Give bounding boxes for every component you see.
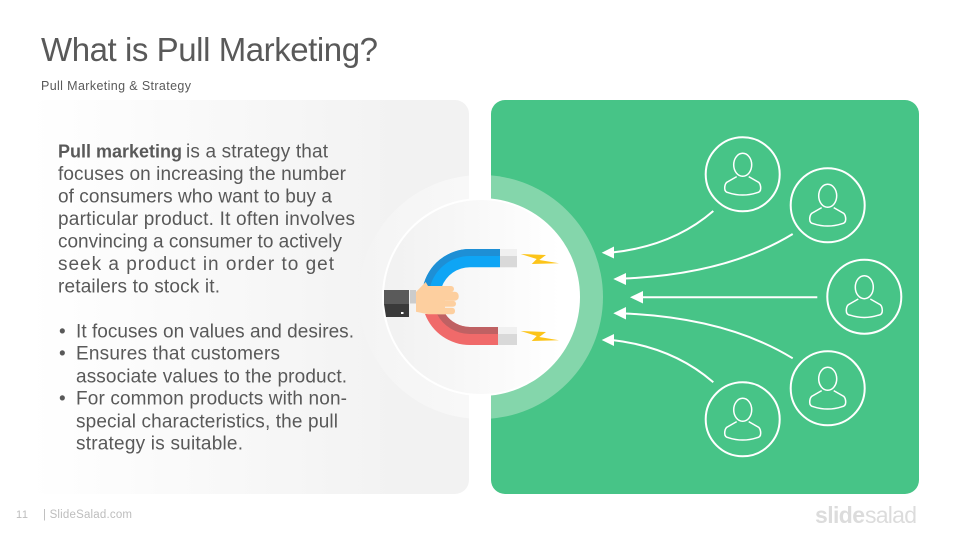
title: What is Pull Marketing?	[41, 31, 378, 68]
bullet list	[59, 322, 354, 454]
bullet list: Ensures that customers	[76, 344, 280, 364]
sleeve and cuff	[384, 290, 416, 317]
bullet list: associate values to the product.	[76, 366, 347, 388]
bullet list: strategy is suitable.	[76, 434, 243, 454]
bullet list: •	[59, 344, 66, 364]
logo: salad	[865, 502, 917, 528]
arrow 3	[630, 291, 817, 304]
subtitle: Pull Marketing & Strategy	[41, 79, 192, 93]
description text: retailers to stock it.	[58, 276, 220, 298]
logo: slide	[815, 502, 865, 528]
bullet list: special characteristics, the pull	[76, 412, 338, 432]
arrow 2	[613, 234, 793, 285]
description text: Pull marketing	[58, 142, 182, 162]
panel: description background	[30, 100, 469, 494]
bullet list: •	[59, 388, 66, 410]
description text	[58, 142, 355, 298]
bullet list: •	[59, 322, 66, 342]
footer page number: 11	[16, 509, 28, 521]
magnet: red pole	[425, 314, 517, 345]
panel: green audience background	[491, 100, 919, 494]
magnet: blue pole	[423, 249, 517, 287]
user icon 1	[706, 137, 780, 211]
user icon 5	[706, 382, 780, 456]
user icon 2	[791, 168, 865, 242]
icon: hand holding magnet	[384, 249, 517, 345]
icon: lightning top	[521, 254, 559, 264]
description text: focuses on increasing the number	[58, 164, 347, 185]
arrow 5	[602, 334, 713, 382]
user icon 3	[827, 260, 901, 334]
bullet list: For common products with non-	[76, 388, 347, 410]
description text: is a strategy that	[186, 142, 329, 162]
icon: lightning bottom	[521, 331, 559, 341]
description text: convincing a consumer to actively	[58, 232, 342, 252]
footer site name: | SlideSalad.com	[43, 509, 132, 521]
arrow 4	[613, 307, 793, 358]
arrow 1	[602, 211, 713, 258]
bullet list: It focuses on values and desires.	[76, 322, 354, 342]
description text: of consumers who want to buy a	[58, 186, 332, 208]
user icon 4	[791, 351, 865, 425]
description text: particular product. It often involves	[58, 209, 355, 230]
ring around magnet	[359, 175, 603, 419]
logo	[815, 502, 917, 528]
description text: seek a product in order to get	[58, 254, 335, 275]
hand	[416, 282, 459, 314]
